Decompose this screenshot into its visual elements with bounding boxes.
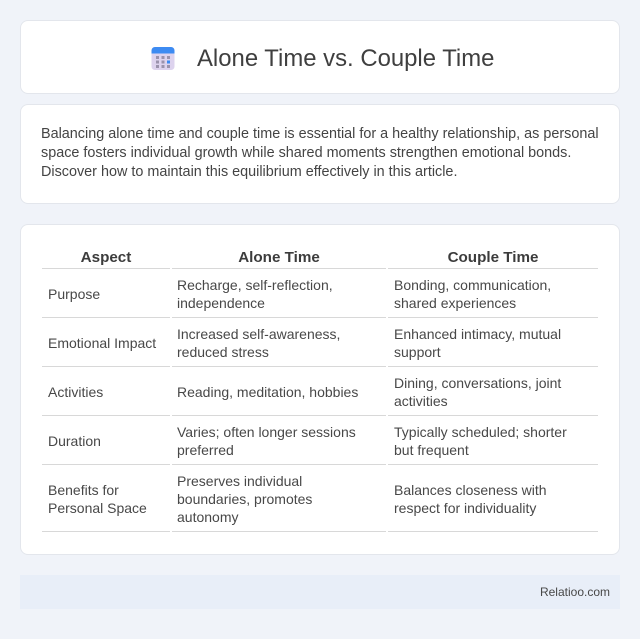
- table content: Couple Time: [448, 249, 538, 266]
- table content: Activities: [48, 384, 103, 400]
- table content: Enhanced intimacy, mutual: [394, 326, 561, 342]
- header panel: [20, 20, 620, 94]
- comparison table panel: [20, 224, 620, 555]
- table content: Recharge, self-reflection,: [177, 277, 333, 293]
- intro text: Balancing alone time and couple time is essential for a healthy relationship, as personal: [41, 126, 599, 142]
- table content: independence: [177, 295, 265, 311]
- table content: Duration: [48, 433, 101, 449]
- table content: Bonding, communication,: [394, 277, 551, 293]
- table content: Purpose: [48, 286, 100, 302]
- table content: Benefits for: [48, 482, 119, 498]
- table content: Varies; often longer sessions: [177, 424, 356, 440]
- intro panel: [20, 104, 620, 204]
- table content: reduced stress: [177, 344, 269, 360]
- intro text: Discover how to maintain this equilibrium effectively in this article.: [41, 164, 457, 180]
- title: Alone Time vs. Couple Time: [197, 45, 494, 72]
- footer text: Relatioo.com: [540, 585, 610, 599]
- table content: Reading, meditation, hobbies: [177, 384, 358, 400]
- table content: Alone Time: [238, 249, 320, 266]
- table content: Personal Space: [48, 500, 147, 516]
- table content: respect for individuality: [394, 500, 536, 516]
- table content: Typically scheduled; shorter: [394, 424, 567, 440]
- table content: boundaries, promotes: [177, 491, 312, 507]
- table content: shared experiences: [394, 295, 516, 311]
- table content: support: [394, 344, 441, 360]
- footer bar: [20, 575, 620, 609]
- table content: Balances closeness with: [394, 482, 547, 498]
- table content: Aspect: [81, 249, 131, 266]
- table content: Increased self-awareness,: [177, 326, 340, 342]
- table content: autonomy: [177, 509, 238, 525]
- table content: preferred: [177, 442, 234, 458]
- intro text: space fosters individual growth while shared moments strengthen emotional bonds.: [41, 145, 571, 161]
- icon: calendar: [152, 47, 174, 70]
- table content: but frequent: [394, 442, 469, 458]
- intro text: [41, 126, 599, 180]
- table content: Dining, conversations, joint: [394, 375, 561, 391]
- table content: activities: [394, 393, 448, 409]
- table content: Preserves individual: [177, 473, 302, 489]
- table content: Emotional Impact: [48, 335, 156, 351]
